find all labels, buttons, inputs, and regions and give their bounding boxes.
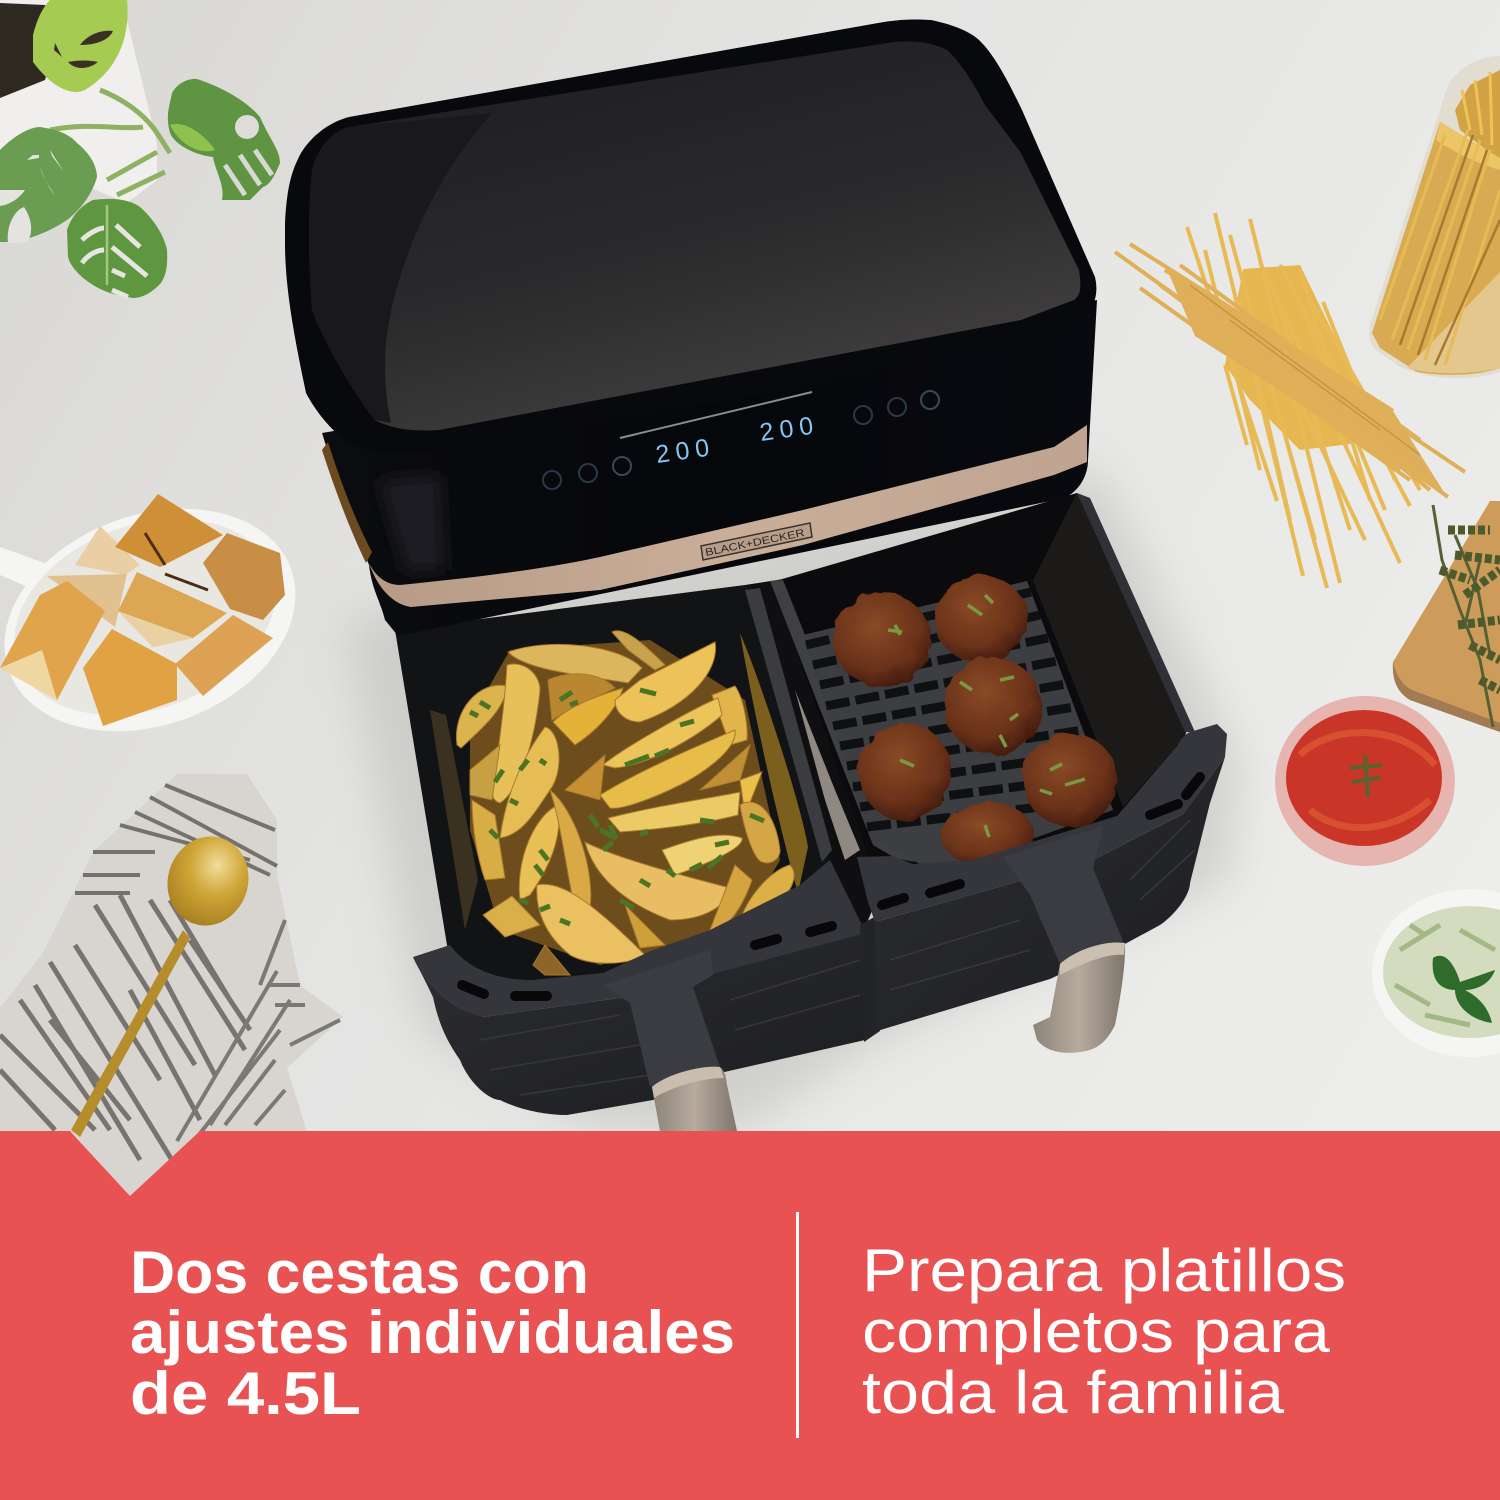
text: right text: toda la familia	[862, 1359, 1285, 1426]
fryer shadow	[345, 470, 1240, 1130]
lid	[285, 19, 1096, 454]
red banner	[0, 1131, 1500, 1500]
right basket interior	[772, 493, 1187, 875]
gap between basket faces	[860, 915, 880, 1042]
right basket front face	[875, 757, 1225, 1031]
wooden board with herbs	[1393, 501, 1500, 732]
control panel displays: 200	[654, 433, 717, 469]
copper band	[369, 425, 1087, 607]
handle 1	[603, 950, 720, 1087]
golden spoon	[71, 826, 260, 1137]
text: right text: completos para	[862, 1298, 1331, 1365]
parsley flakes	[470, 690, 764, 924]
potato wedges	[456, 631, 794, 975]
right basket rim	[857, 724, 1227, 922]
striped towel	[0, 774, 343, 1196]
brand badge: BLACK+DECKER	[704, 527, 806, 559]
text: right text: Prepara platillos	[862, 1237, 1346, 1304]
heading: left text: de 4.5L	[130, 1360, 361, 1427]
heading: left text	[130, 1239, 735, 1427]
left basket	[395, 578, 895, 1131]
tomato sauce bowl	[1275, 696, 1455, 866]
main body front	[322, 300, 1097, 636]
right basket	[770, 493, 1227, 1053]
brand badge	[701, 523, 812, 560]
spaghetti on counter	[1115, 213, 1465, 588]
divider	[796, 1212, 799, 1438]
handle 2	[1003, 826, 1123, 964]
left basket rim	[413, 860, 862, 1017]
pasta jar top right	[1369, 56, 1500, 378]
air fryer	[285, 19, 1240, 1131]
herbs on meatballs	[888, 595, 1085, 837]
plant: pot and monstera leaves	[0, 0, 280, 298]
left basket front face	[413, 930, 865, 1115]
control panel displays	[543, 391, 939, 489]
heading: left text: ajustes individuales	[130, 1299, 735, 1366]
air fryer grill	[803, 581, 1113, 864]
heading: left text: Dos cestas con	[130, 1239, 589, 1306]
control panel displays: 200	[758, 411, 821, 447]
gap between baskets	[745, 578, 895, 935]
herb dip bowl	[1372, 889, 1500, 1057]
bread bowl	[0, 470, 327, 770]
left basket interior	[395, 585, 832, 995]
text: right text	[862, 1237, 1346, 1426]
meatballs	[833, 575, 1117, 868]
